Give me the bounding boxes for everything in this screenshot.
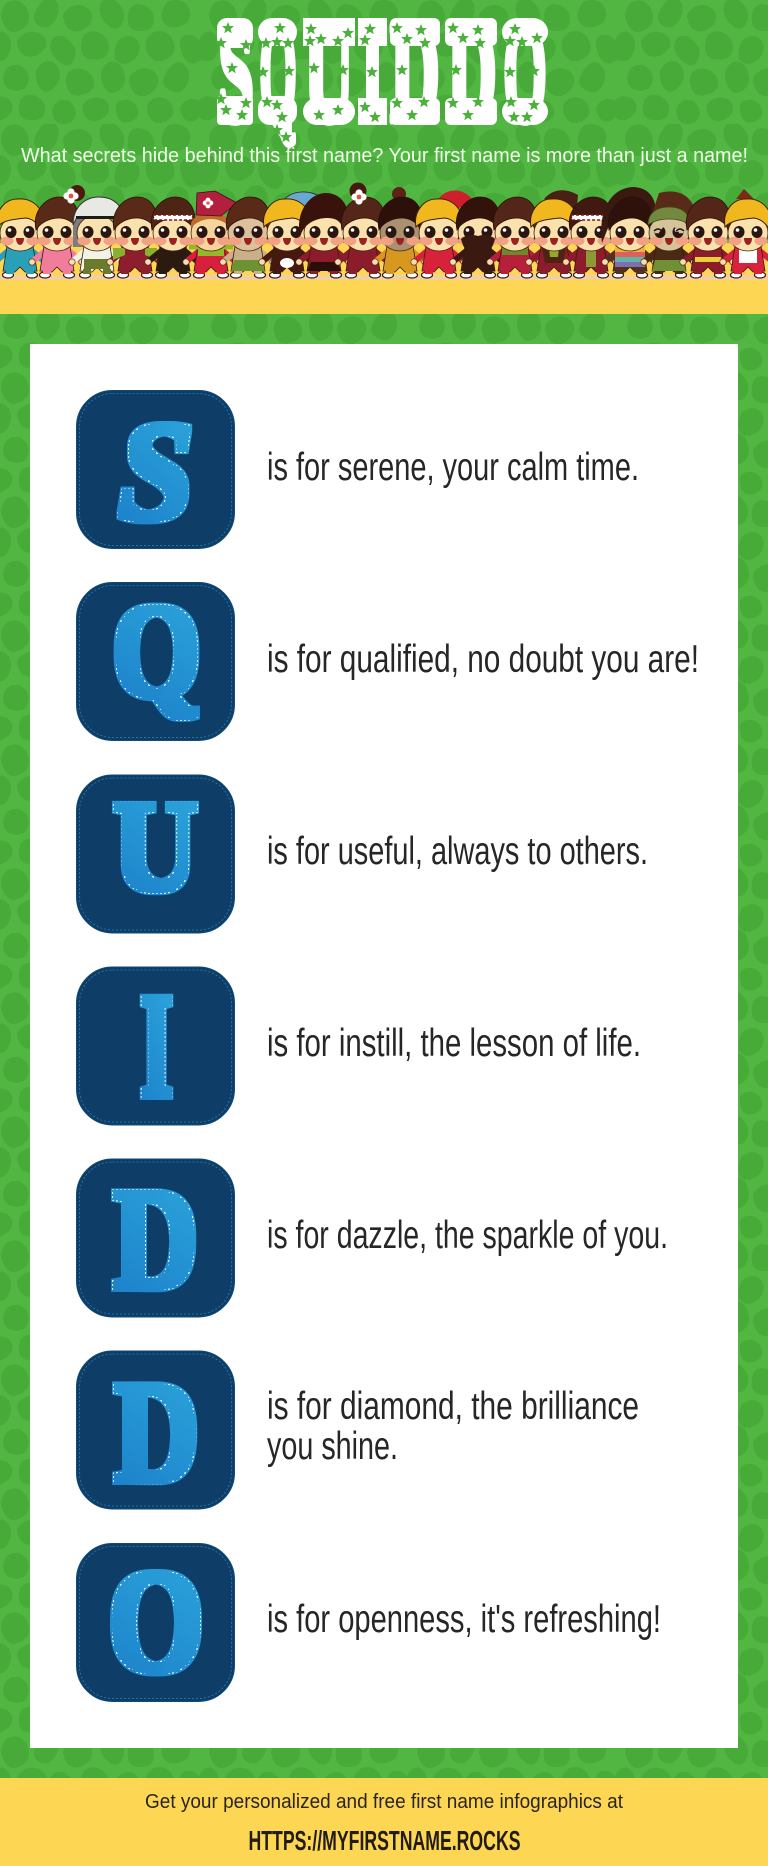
child 14 xyxy=(487,197,543,278)
icon: letter U: U xyxy=(113,775,198,919)
icon: letter I xyxy=(76,963,234,1129)
child 15 xyxy=(526,190,582,278)
child 19 xyxy=(680,197,736,278)
icon: letter D xyxy=(76,1158,234,1320)
child 16 xyxy=(563,197,619,278)
footer band xyxy=(0,1778,768,1866)
icon: letter D xyxy=(76,1351,234,1513)
icon: letter D: D xyxy=(114,1351,199,1513)
footer text: Get your personalized and free first name infographics at xyxy=(145,1791,623,1813)
child 7 xyxy=(220,197,276,278)
yellow band behind characters xyxy=(0,243,768,314)
text: D diamond lines: is for diamond, the brilliance xyxy=(267,1385,639,1428)
text: S line: is for serene, your calm time. xyxy=(267,446,639,489)
header: name title xyxy=(215,0,548,153)
text: U line: is for useful, always to others. xyxy=(267,830,648,873)
panel: white content card xyxy=(30,344,738,1748)
child 8 xyxy=(259,192,323,278)
row O xyxy=(76,1540,661,1704)
icon: letter S: S xyxy=(118,392,194,550)
row I xyxy=(76,963,641,1129)
child 12 xyxy=(411,190,473,278)
child 4 xyxy=(107,197,163,278)
icon: letter Q xyxy=(76,577,234,740)
text: D diamond lines: you shine. xyxy=(267,1425,398,1468)
row S xyxy=(76,390,639,550)
icon: letter I: I xyxy=(141,963,172,1129)
child 2 xyxy=(29,185,85,278)
icon: letter U xyxy=(76,775,234,933)
row D (dazzle) xyxy=(76,1158,668,1320)
footer url: HTTPS://MYFIRSTNAME.ROCKS xyxy=(248,1825,520,1856)
illustration: row of cartoon children in world costumes xyxy=(0,182,768,278)
icon: letter Q: Q xyxy=(112,577,201,726)
row Q xyxy=(76,577,699,740)
icon: letter D: D xyxy=(113,1158,198,1320)
child 9 xyxy=(296,193,352,278)
child 11 xyxy=(372,187,428,278)
icon: letter O: O xyxy=(108,1540,204,1704)
text: D diamond lines xyxy=(267,1385,639,1468)
child 17 xyxy=(601,187,658,278)
child 3 xyxy=(69,197,125,278)
child 18 xyxy=(641,192,697,278)
child 1 xyxy=(0,199,48,278)
child 5 xyxy=(145,197,201,278)
child 20 xyxy=(720,189,768,278)
text: I line: is for instill, the lesson of life. xyxy=(267,1022,641,1065)
row U xyxy=(76,775,648,933)
icon: letter S xyxy=(76,390,234,550)
child 6 xyxy=(183,191,239,278)
subtitle: What secrets hide behind this first name? Your first name is more than just a name! xyxy=(21,145,748,167)
child 13 xyxy=(450,197,506,278)
child 10 xyxy=(335,182,391,278)
row D (diamond) xyxy=(76,1351,639,1513)
